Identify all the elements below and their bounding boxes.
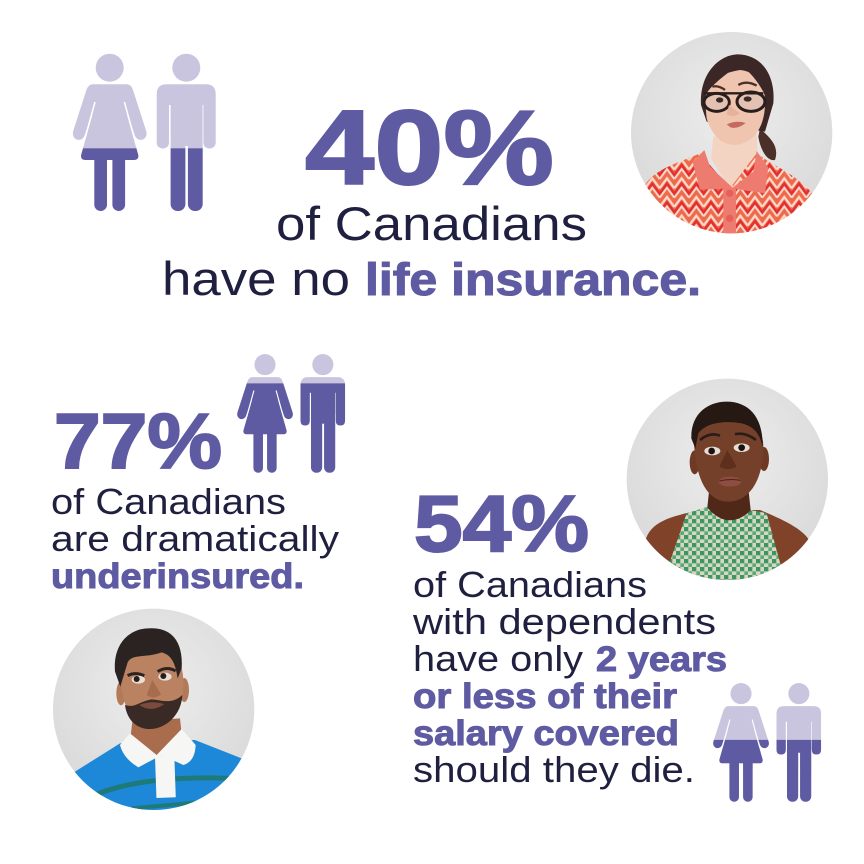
text: of Canadians are dramatically underinsured: of Canadians [51,481,286,522]
text: of Canadians with dependents have only 2 years or less of their salary covered should they die [412,564,727,790]
text: of Canadians with dependents have only 2 years or less of their salary covered should they die: should they die. [413,749,695,790]
icon: woman and man 77 percent filled [237,354,345,473]
text: have no life insurance [162,252,701,305]
text: have no life insurance: life insurance. [365,254,701,305]
heading: 40%: 40% [305,89,554,207]
section: 77 percent statistic [51,354,345,818]
photo: man looking up [53,609,254,818]
text: of Canadians with dependents have only 2 years or less of their salary covered should they die: salary covered [413,714,679,753]
heading: 77%: 77% [54,397,222,485]
photo: woman with glasses [631,32,832,238]
section: 54 percent statistic [412,379,828,802]
text: of Canadians with dependents have only 2 years or less of their salary covered should they die: of Canadians [413,564,647,605]
section: 40 percent statistic [73,32,832,305]
icon: woman and man 40 percent filled [73,54,216,211]
text: of Canadians with dependents have only 2 years or less of their salary covered should they die: 2 years [596,640,727,679]
heading: 54%: 54% [414,479,589,568]
text: of Canadians with dependents have only 2 years or less of their salary covered should they die: with dependents [412,601,716,642]
text: of Canadians are dramatically underinsured: are dramatically [51,518,339,559]
text: have no life insurance: have no [162,252,350,305]
text: of Canadians are dramatically underinsured: underinsured. [51,557,304,596]
icon: woman and man 54 percent filled [713,683,821,802]
text: of Canadians with dependents have only 2 years or less of their salary covered should they die: or less of their [413,677,677,716]
photo: worried woman in green top [627,379,828,588]
text: of Canadians with dependents have only 2 years or less of their salary covered should they die: have only [413,638,583,679]
text: of Canadians: of Canadians [276,197,587,250]
text: of Canadians are dramatically underinsured [51,481,339,596]
